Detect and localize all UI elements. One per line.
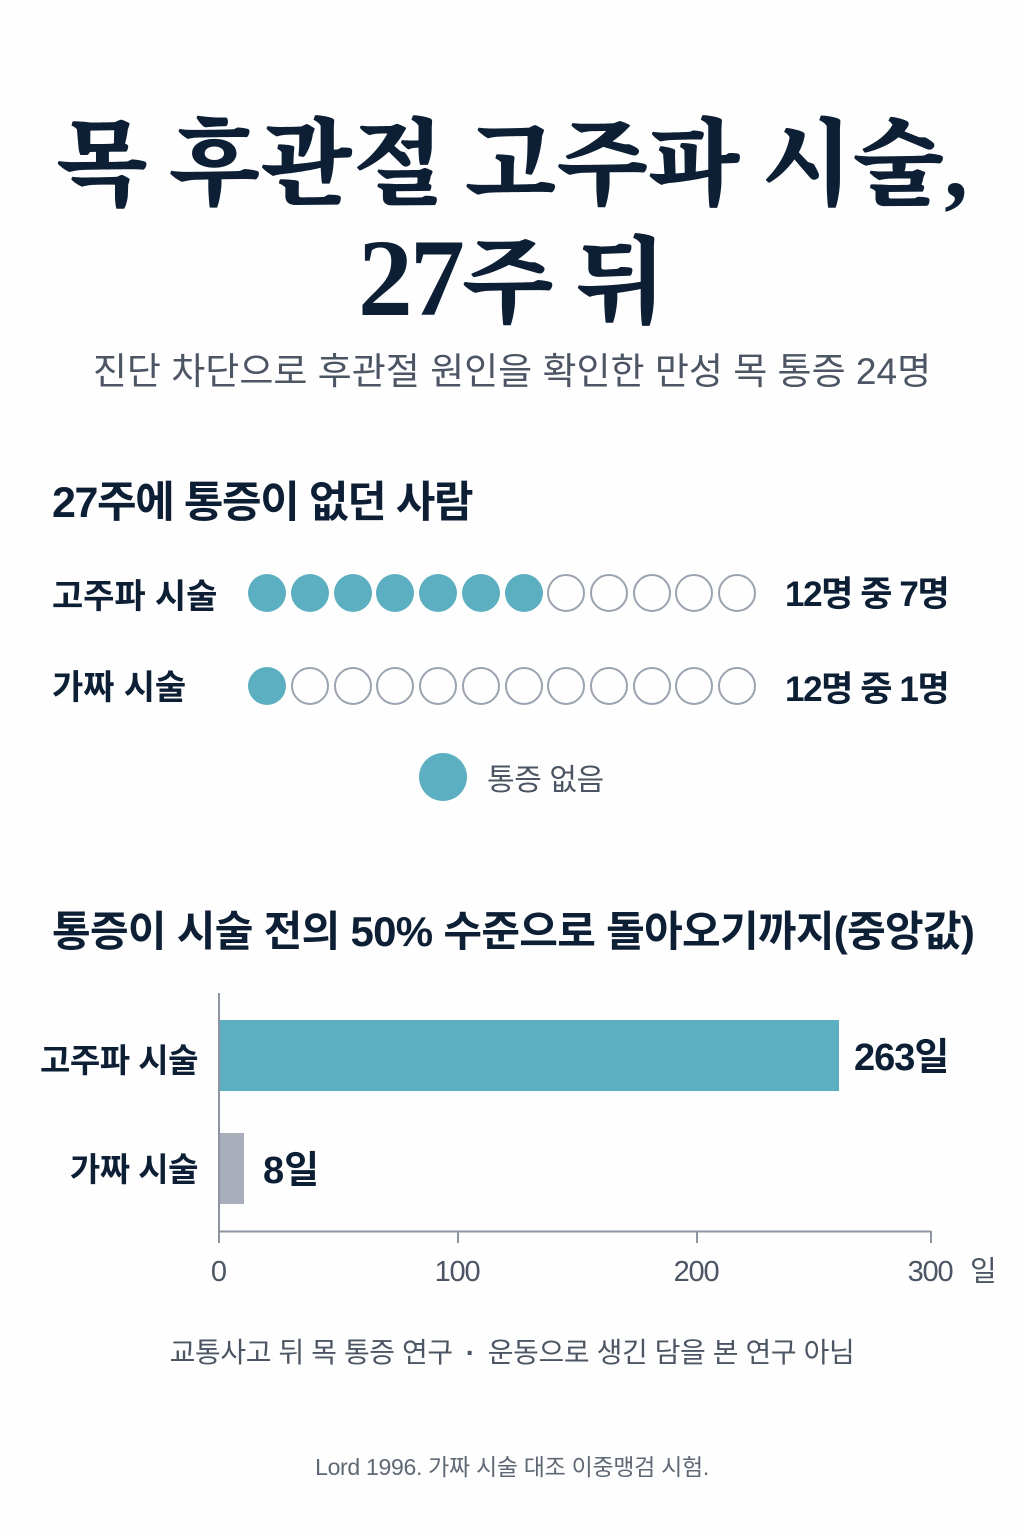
note: ·: [466, 1337, 475, 1368]
title: 27주 뒤: [358, 217, 666, 339]
axis labels: 300: [908, 1256, 952, 1288]
bar label: sham: 가짜 시술: [70, 1151, 198, 1188]
heading: no pain at 27 weeks: 27주에 통증이 없던 사람: [52, 479, 472, 527]
axis labels: [211, 1256, 997, 1288]
dot row: radiofrequency: [248, 574, 755, 612]
row label: radiofrequency: 고주파 시술: [52, 578, 217, 616]
row label: sham: 가짜 시술: [52, 669, 186, 707]
title: [56, 112, 968, 339]
bar label: radiofrequency: 고주파 시술: [40, 1042, 198, 1079]
legend dot: [419, 753, 467, 801]
note: 교통사고 뒤 목 통증 연구 운동으로 생긴 담을 본 연구 아님: [170, 1337, 854, 1368]
dot row: sham: [248, 667, 755, 705]
bar value: 263 days: 263일: [854, 1037, 948, 1079]
legend: [419, 753, 604, 801]
dot chart: [248, 574, 756, 705]
heading: time to return: 통증이 시술 전의 50% 수준으로 돌아오기까지(중앙값): [52, 908, 974, 955]
subtitle: 진단 차단으로 후관절 원인을 확인한 만성 목 통증 24명: [93, 351, 931, 392]
axis labels: 100: [435, 1256, 479, 1288]
legend label: 통증 없음: [487, 764, 604, 797]
source: Lord 1996. 가짜 시술 대조 이중맹검 시험.: [315, 1454, 709, 1480]
title: 목 후관절 고주파 시술,: [56, 112, 968, 218]
axis labels: 0: [211, 1256, 227, 1288]
row value: 7 of 12: 12명 중 7명: [785, 575, 948, 614]
axis labels: 일: [970, 1256, 997, 1288]
axis labels: 200: [674, 1256, 718, 1288]
row value: 1 of 12: 12명 중 1명: [785, 670, 948, 709]
bar value: 8 days: 8일: [263, 1150, 319, 1192]
